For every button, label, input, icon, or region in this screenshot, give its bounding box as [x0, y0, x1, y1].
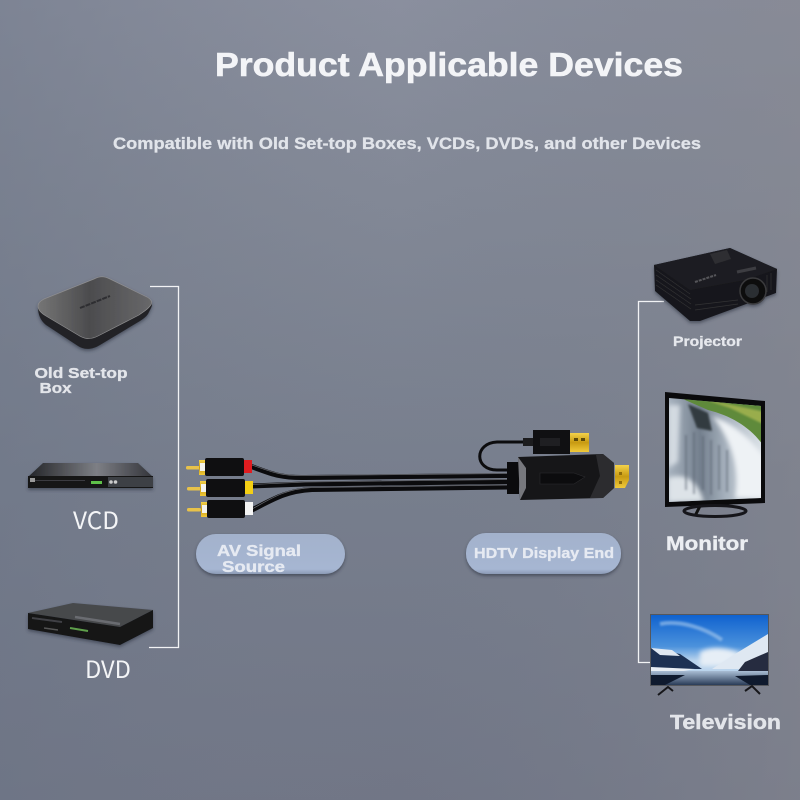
HDMI adapter body: [507, 454, 614, 500]
subtitle: Compatible with Old Set-top Boxes, VCDs, DVDs, and other Devices: [113, 134, 701, 153]
cable highlights: [252, 465, 510, 509]
label: monitor: Monitor: [666, 533, 748, 555]
label: projector: Projector: [673, 333, 743, 349]
icon: DVD player: [28, 603, 153, 645]
left bracket: [149, 286, 178, 648]
label: VCD: VCD: [73, 501, 119, 536]
label: old set-top box: [34, 365, 128, 397]
icon: set-top box: [38, 277, 152, 349]
icon: television: [650, 614, 769, 695]
icon: projector: [654, 248, 777, 321]
USB plug: [523, 430, 589, 454]
pill: HDTV display end: [466, 533, 621, 574]
label: DVD: DVD: [85, 650, 131, 685]
pill: AV signal source: Source: [222, 559, 285, 576]
cable wires: [250, 466, 510, 511]
label: old set-top box: Box: [40, 380, 72, 397]
HDMI gold plug: [615, 465, 629, 488]
icon: VCD player: [28, 463, 153, 488]
RCA plug: white: [187, 500, 253, 518]
pill: HDTV display end: HDTV Display End: [474, 545, 614, 562]
USB cord loop: [480, 442, 525, 470]
right bracket: [638, 302, 664, 662]
icon: monitor: [665, 392, 765, 516]
pill: AV signal source: [196, 534, 345, 576]
title: Product Applicable Devices: [215, 46, 683, 83]
label: old set-top box: Old Set-top: [34, 365, 128, 382]
RCA plug: red: [186, 458, 252, 476]
pill: AV signal source: AV Signal: [217, 543, 301, 560]
cable assembly: [186, 430, 629, 518]
label: television: Television: [670, 712, 781, 734]
RCA plug: yellow: [187, 479, 253, 497]
